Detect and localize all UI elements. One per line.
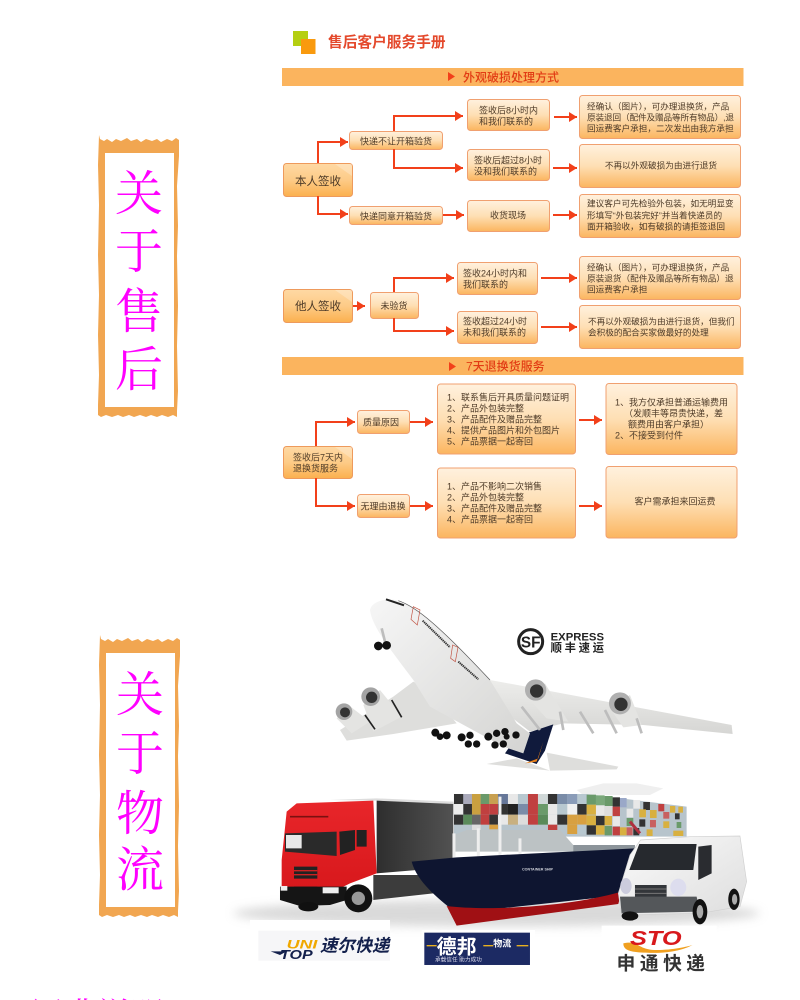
arrow: to quality <box>316 422 355 446</box>
arrow: self-signed up <box>318 142 348 163</box>
arrow: refuses to within 8h <box>394 116 463 131</box>
white van <box>618 836 747 924</box>
logo: STO <box>602 926 717 974</box>
section band: 7天退换货服务: 7天退换货服务 <box>466 358 545 374</box>
logo: UNITOP: UNI <box>287 938 318 951</box>
arrow: to result top <box>541 277 577 279</box>
logo: UNITOP <box>250 920 391 970</box>
logo: UNITOP: 速尔快递 <box>320 935 391 955</box>
box: no-reason conditions list: 2、产品外包装完整 <box>447 492 524 502</box>
logo: Deppon: 德邦 <box>437 935 477 958</box>
arrow: quality to list <box>410 421 433 423</box>
title: 售后客户服务手册 <box>328 33 446 51</box>
arrow: to result 1 <box>554 116 577 118</box>
panel title: 关于售后: 关 <box>115 168 163 221</box>
panel title: 关于售后 <box>115 168 163 397</box>
box: not inspected: 未验货 <box>380 300 408 311</box>
section: exterior damage handling <box>282 68 744 238</box>
section band: 外观破损处理方式: 外观破损处理方式 <box>463 70 559 84</box>
box: no-reason conditions list: 3、产品配件及赠品完整 <box>447 502 542 514</box>
box: no reason: 无理由退换 <box>360 500 406 512</box>
logo: Deppon <box>422 930 535 970</box>
arrow: refuses to after 8h <box>394 149 463 168</box>
box: quality conditions list: 3、产品配件及赠品完整 <box>447 414 542 424</box>
box: quality reason: 质量原因 <box>363 416 399 428</box>
box: quality conditions list: 2、产品外包装完整 <box>447 402 524 414</box>
icon: overlapping squares <box>293 31 316 54</box>
panel title: 关于物流: 关 <box>116 669 164 722</box>
box: result no return: 不再以外观破损为由进行退货，但我们 <box>588 316 735 326</box>
section: signed by another person <box>284 256 740 348</box>
box: quality shipping terms: 2、不接受到付件 <box>615 430 683 440</box>
box: within 24 hours <box>458 262 538 294</box>
box: contact after 8 hours <box>468 150 550 180</box>
box: after 24 hours: 签收超过24小时 <box>463 316 527 326</box>
panel title: 关于物流: 物 <box>116 788 164 841</box>
logo: SF Express <box>519 630 605 654</box>
panel title: 关于售后: 后 <box>115 344 163 397</box>
box: result return allowed: 回运费客户承担，二次发出由我方承担 <box>587 122 734 134</box>
box: result no return: 会积极的配合买家做最好的处理 <box>588 326 709 338</box>
box: quality conditions list: 1、联系售后开具质量问题证明 <box>447 392 569 402</box>
arrow: list to terms bottom <box>579 505 602 507</box>
box: not inspected <box>370 292 418 318</box>
box: 本人签收 <box>284 164 352 196</box>
box: result return allowed <box>580 256 740 300</box>
box: result no return: 不再以外观破损为由进行退货 <box>605 160 717 170</box>
arrow: no reason to list <box>410 505 433 507</box>
box: result inspection advice <box>580 194 740 238</box>
arrow: allows to on-site <box>443 214 464 216</box>
box: quality shipping terms: （发顺丰等昂贵快递，差 <box>624 408 723 418</box>
container ship <box>412 783 687 926</box>
box: after 24 hours: 未和我们联系的 <box>463 326 526 338</box>
box: quality conditions list <box>438 384 576 454</box>
panel title: 关于物流: 于 <box>116 728 164 781</box>
logo: UNITOP: TOP <box>280 947 313 962</box>
arrow: up to within 24h <box>394 278 454 292</box>
box: no-reason conditions list: 4、产品票据一起寄回 <box>447 514 533 524</box>
box: result return allowed: 原装退回（配件及赠品等所有物品）,退 <box>587 112 734 122</box>
box: no reason <box>358 494 410 518</box>
box: no-reason conditions list <box>438 468 576 538</box>
box: result return allowed: 回运费客户承担 <box>587 284 648 294</box>
box: contact after 8 hours: 签收后超过8小时 <box>474 154 542 166</box>
box: no-reason shipping terms <box>606 466 737 538</box>
box: result inspection advice: 建议客户可先检验外包装，如无明显变 <box>587 198 734 208</box>
arrow: to result 2 <box>553 167 577 169</box>
box: within 24 hours: 签收24小时内和 <box>463 268 527 278</box>
box: quality shipping terms: 1、我方仅承担普通运输费用 <box>615 396 728 408</box>
arrow: to result 3 <box>553 214 577 216</box>
panel title: 关于售后: 于 <box>115 226 163 279</box>
box: result return allowed <box>580 96 740 138</box>
box: result no return <box>580 306 740 348</box>
box: quality shipping terms <box>606 384 737 454</box>
box: result return allowed: 经确认（图片），可办理退换货，产品 <box>587 262 729 272</box>
scroll panel: about after-sales <box>98 135 179 417</box>
panel title: 关于物流 <box>116 669 164 897</box>
box: after 24 hours <box>458 312 538 344</box>
box: contact within 8 hours: 和我们联系的 <box>479 116 533 126</box>
arrow: to no reason <box>316 478 355 506</box>
box: contact after 8 hours: 没和我们联系的 <box>474 166 537 176</box>
panel title: 关于物流: 流 <box>116 844 164 897</box>
panel title: 关于售后: 售 <box>115 286 163 339</box>
logo: STO: 申通快递 <box>617 953 705 974</box>
red truck <box>280 798 453 912</box>
logo: SF Express: 顺丰速运 <box>551 640 605 654</box>
box: quality shipping terms: 额费用由客户承担） <box>628 418 709 430</box>
box: quality reason <box>358 410 410 434</box>
box: 本人签收: 本人签收 <box>295 174 341 188</box>
illustration: airplane <box>336 599 733 771</box>
box: result return allowed: 经确认（图片），可办理退换货，产品 <box>587 100 729 112</box>
box: 他人签收: 他人签收 <box>295 299 341 313</box>
scroll panel: about logistics <box>99 635 180 917</box>
box: quality conditions list: 4、提供产品图片和外包图片 <box>447 424 560 436</box>
box: courier allows inspection: 快递同意开箱验货 <box>360 210 432 222</box>
box: result no return <box>580 144 740 188</box>
arrow: to result bottom <box>541 326 577 328</box>
arrow: down to after 24h <box>394 318 454 331</box>
arrow: list to terms top <box>579 419 602 421</box>
arrow: self-signed down <box>318 196 348 214</box>
box: contact within 8 hours: 签收后8小时内 <box>479 104 538 116</box>
section band: 外观破损处理方式 <box>282 68 744 86</box>
box: 7-day service <box>284 446 352 478</box>
box: result return allowed: 原装退货（配件及赠品等所有物品）退 <box>587 272 734 284</box>
box: 7-day service: 签收后7天内 <box>293 452 343 462</box>
arrow: to not inspected <box>353 305 365 307</box>
box: result inspection advice: 形填写“外包装完好”并当着快递员的 <box>587 210 722 220</box>
box: within 24 hours: 我们联系的 <box>463 278 508 290</box>
box: 7-day service: 退换货服务 <box>293 462 338 474</box>
box: no-reason conditions list: 1、产品不影响二次销售 <box>447 480 542 492</box>
box: courier refuses inspection: 快递不让开箱验货 <box>360 136 432 146</box>
container ship: CONTAINER SHIP <box>522 868 554 872</box>
box: contact within 8 hours <box>468 100 550 130</box>
box: on-site receipt <box>468 200 550 232</box>
logo: SF Express: EXPRESS <box>551 632 604 644</box>
box: no-reason shipping terms: 客户需承担来回运费 <box>634 496 716 506</box>
box: courier allows inspection <box>350 206 442 224</box>
box: result inspection advice: 面开箱验收，如有破损的请拒签退回 <box>587 220 725 232</box>
logo: SF Express: SF <box>521 634 540 651</box>
box: on-site receipt: 收货现场 <box>490 210 526 220</box>
logo: Deppon: 承载信任 助力成功 <box>435 956 482 964</box>
section band: 7天退换货服务 <box>282 357 744 375</box>
box: 他人签收 <box>284 290 352 322</box>
logo: STO: STO <box>630 927 682 950</box>
box: courier refuses inspection <box>350 132 442 150</box>
section: 7-day returns <box>282 357 744 538</box>
illustration: vehicles <box>233 783 760 927</box>
box: quality conditions list: 5、产品票据一起寄回 <box>447 436 533 446</box>
logo: Deppon: 物流 <box>493 938 511 949</box>
